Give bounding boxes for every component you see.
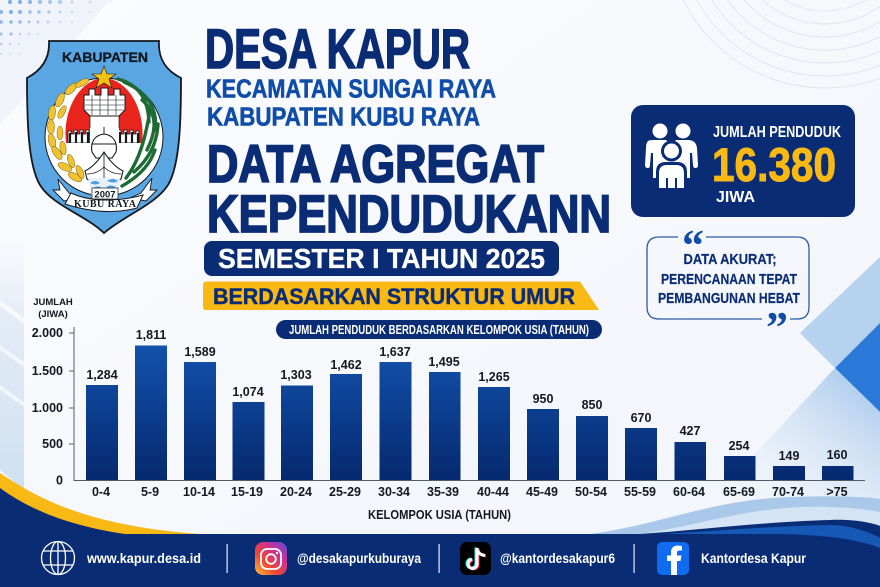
decoration: dot pattern top left — [0, 0, 111, 55]
value labels: 670 — [631, 411, 651, 425]
footer: contact bar — [42, 542, 806, 575]
value labels: 149 — [779, 449, 799, 463]
panel: total population: JUMLAH PENDUDUK — [713, 124, 841, 141]
subtitle: Kabupaten: KABUPATEN KUBU RAYA — [207, 104, 480, 132]
y axis: 1.500 — [32, 364, 63, 378]
value labels: 254 — [729, 439, 749, 453]
panel: total population: JIWA — [716, 189, 755, 206]
heading: Kependudukann: KEPENDUDUKANN — [207, 185, 611, 244]
value labels: 427 — [680, 424, 700, 438]
emblem: Kabupaten Kubu Raya shield: 2007 — [94, 190, 116, 200]
y axis: 0 — [56, 474, 63, 488]
icon: globe — [42, 542, 74, 574]
icon: opening quote: “ — [682, 221, 704, 270]
y axis: 1.000 — [32, 401, 63, 415]
category labels: 20-24 — [280, 485, 312, 499]
facebook name: Kantordesa Kapur — [701, 550, 806, 566]
value labels: 1,637 — [379, 345, 411, 359]
title: Desa Kapur: DESA KAPUR — [205, 17, 470, 80]
category labels: 35-39 — [427, 485, 459, 499]
callout: quote: DATA AKURAT; — [684, 251, 776, 268]
tiktok handle: @kantordesakapur6 — [500, 550, 615, 566]
y axis — [32, 326, 865, 488]
category labels: 60-64 — [673, 485, 705, 499]
value labels: 1,284 — [86, 368, 118, 382]
y axis: 2.000 — [32, 326, 63, 340]
value labels: 950 — [533, 392, 553, 406]
y axis title — [33, 297, 73, 320]
value labels: 1,265 — [478, 370, 510, 384]
callout: quote — [647, 221, 809, 352]
bar chart: population by age group — [32, 297, 865, 522]
category labels — [92, 485, 848, 499]
category labels: 55-59 — [624, 485, 656, 499]
category labels: 0-4 — [92, 485, 110, 499]
callout: quote: PERENCANAAN TEPAT — [661, 271, 797, 288]
value labels: 1,462 — [330, 358, 362, 372]
y axis title: (JIWA) — [38, 309, 68, 320]
banner: semester: SEMESTER I TAHUN 2025 — [218, 243, 545, 274]
emblem: Kabupaten Kubu Raya shield: KABUPATEN — [62, 50, 148, 65]
icon: closing quote: ” — [766, 303, 788, 352]
panel: total population: 16.380 — [712, 138, 836, 191]
instagram handle: @desakapurkuburaya — [297, 550, 421, 566]
chart heading pill — [276, 320, 602, 339]
category labels: >75 — [826, 485, 848, 499]
emblem: Kabupaten Kubu Raya shield: KUBU RAYA — [74, 199, 137, 210]
value labels: 1,074 — [232, 385, 264, 399]
value labels: 1,811 — [136, 328, 166, 342]
category labels: 5-9 — [141, 485, 159, 499]
category labels: 45-49 — [526, 485, 558, 499]
value labels: 850 — [582, 398, 602, 412]
subtitle: Kecamatan: KECAMATAN SUNGAI RAYA — [206, 76, 496, 104]
bars — [86, 346, 854, 480]
category labels: 40-44 — [477, 485, 509, 499]
banner: struktur umur: BERDASARKAN STRUKTUR UMUR — [213, 284, 575, 309]
panel: total population — [631, 105, 855, 217]
emblem: Kabupaten Kubu Raya shield — [27, 41, 181, 233]
y axis title: JUMLAH — [33, 297, 73, 308]
value labels: 1,495 — [428, 355, 460, 369]
value labels: 160 — [827, 448, 847, 462]
footer waves — [0, 473, 880, 587]
category labels: 15-19 — [231, 485, 263, 499]
heading: Data Agregat: DATA AGREGAT — [207, 135, 544, 194]
value labels — [86, 328, 847, 463]
value labels: 1,303 — [280, 368, 312, 382]
icon: facebook — [657, 542, 689, 575]
y axis: 500 — [42, 437, 63, 451]
category labels: 50-54 — [575, 485, 607, 499]
website: www.kapur.desa.id — [86, 550, 201, 566]
category labels: 10-14 — [183, 485, 215, 499]
icon: instagram — [255, 542, 287, 575]
category labels: 70-74 — [772, 485, 804, 499]
x axis title: KELOMPOK USIA (TAHUN) — [368, 507, 511, 522]
chart heading pill: JUMLAH PENDUDUK BERDASARKAN KELOMPOK USIA (TAHUN) — [289, 323, 589, 337]
value labels: 1,589 — [184, 345, 216, 359]
category labels: 30-34 — [378, 485, 410, 499]
icon: family — [645, 124, 698, 188]
icon: tiktok — [460, 542, 491, 575]
category labels: 25-29 — [329, 485, 361, 499]
category labels: 65-69 — [723, 485, 755, 499]
decoration: right side diamonds — [700, 257, 880, 505]
callout: quote: PEMBANGUNAN HEBAT — [658, 290, 800, 307]
